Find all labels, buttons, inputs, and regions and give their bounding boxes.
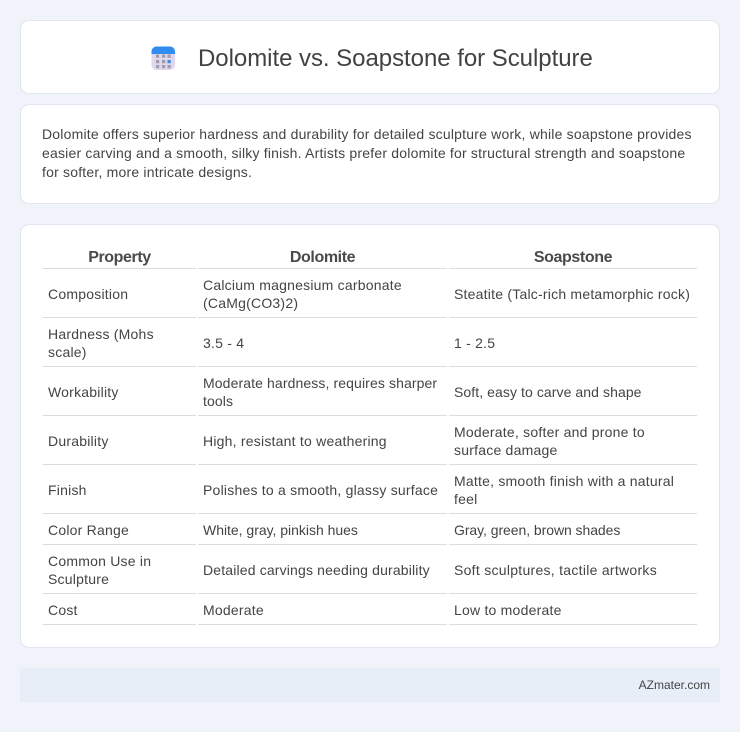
column header: Dolomite: Dolomite	[290, 249, 355, 266]
title card	[20, 20, 720, 94]
row: Common Use	[48, 553, 151, 587]
row: Finish: Finish	[48, 482, 87, 498]
table: 1 - 2.5	[454, 335, 495, 351]
footer bar	[20, 668, 720, 702]
table: Soft sculptures, tactile artworks	[454, 562, 657, 578]
table: (CaMg(CO3)2)	[203, 295, 298, 311]
table: Matte, smooth finish with a natural	[454, 473, 674, 489]
intro text	[42, 126, 692, 180]
row: Hardness: Hardness (Mohs	[48, 326, 154, 342]
row: Cost: Cost	[48, 602, 78, 618]
row: Common Use: Common Use in	[48, 553, 151, 569]
table: White, gray, pinkish hues	[203, 522, 358, 538]
footer credit: AZmater.com	[639, 678, 710, 692]
intro text panel	[20, 104, 720, 204]
table: tools	[203, 393, 233, 409]
table: surface damage	[454, 442, 557, 458]
table: Calcium magnesium carbonate	[203, 277, 402, 293]
table: Polishes to a smooth, glassy surface	[203, 482, 438, 498]
row: Hardness	[48, 326, 154, 360]
table: 3.5 - 4	[203, 335, 244, 351]
heading: Dolomite vs. Soapstone for Sculpture	[198, 45, 593, 72]
table: Moderate	[203, 602, 264, 618]
intro text: Dolomite offers superior hardness and durability for detailed sculpture work, while soapstone provides	[42, 126, 692, 142]
table: Gray, green, brown shades	[454, 522, 620, 538]
table: feel	[454, 491, 477, 507]
row: Color Range: Color Range	[48, 522, 129, 538]
row: Hardness: scale)	[48, 344, 87, 360]
table: Moderate hardness, requires sharper	[203, 375, 437, 391]
table: High, resistant to weathering	[203, 433, 387, 449]
row: Workability: Workability	[48, 384, 119, 400]
row: Durability: Durability	[48, 433, 109, 449]
intro text: for softer, more intricate designs.	[42, 164, 252, 180]
table panel	[20, 224, 720, 648]
table: Detailed carvings needing durability	[203, 562, 430, 578]
row: Composition: Composition	[48, 286, 128, 302]
intro text: easier carving and a smooth, silky finish. Artists prefer dolomite for structural strength and soapstone	[42, 145, 685, 161]
row: Common Use: Sculpture	[48, 571, 109, 587]
icon: calendar grid	[152, 46, 175, 70]
table: Soft, easy to carve and shape	[454, 384, 642, 400]
table: Moderate, softer and prone to	[454, 424, 645, 440]
column header: Soapstone: Soapstone	[534, 249, 612, 266]
table: Steatite (Talc-rich metamorphic rock)	[454, 286, 690, 302]
table: Low to moderate	[454, 602, 562, 618]
column header: Property: Property	[88, 249, 151, 266]
